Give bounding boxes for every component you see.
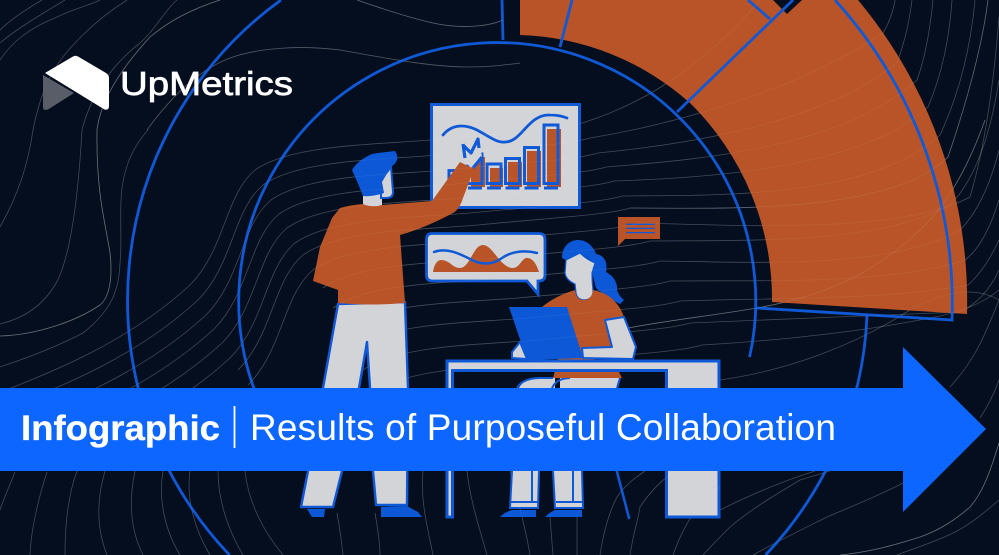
whiteboard with bar chart [432,104,580,208]
banner arrow [0,347,986,512]
woman: arms [512,317,636,359]
banner divider [234,406,235,448]
man: head and neck [352,151,397,207]
logo icon [43,56,109,110]
woman shirt hem over desk opening [553,372,622,378]
man: hand [463,139,482,168]
logo: UpMetrics [43,56,293,110]
woman: orange shirt [540,290,624,378]
man: orange sweater [313,162,474,304]
laptop [509,307,583,360]
small orange chat bubble [618,217,660,246]
woman at desk with laptop [500,240,636,518]
speech bubble with area chart [426,234,545,294]
inner blue ring [239,43,756,390]
outer blue ring [128,0,867,555]
banner subtitle: Results of Purposeful Collaboration [250,407,836,448]
woman: face and neck [565,253,595,300]
logo wordmark: UpMetrics [120,65,293,102]
chair leg [616,468,629,518]
man: shoes [307,506,422,517]
woman: legs [510,378,620,508]
woman: hair [562,240,624,304]
man: trousers [301,302,408,507]
woman: shoes [500,510,582,517]
banner heading: Infographic: Infographic [21,409,220,448]
chart bars [449,125,561,188]
man pointing at whiteboard [301,139,482,517]
desk [447,361,719,517]
panel: orange radial wedge [502,0,967,320]
